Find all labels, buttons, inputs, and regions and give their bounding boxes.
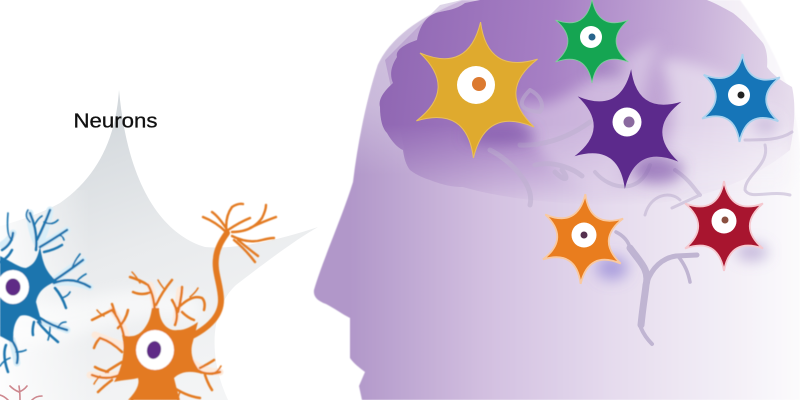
crimson star neuron: [685, 181, 763, 271]
purple star neuron: [573, 66, 683, 192]
blue neuron: [0, 210, 90, 372]
label: Neurons: Neurons: [74, 110, 158, 132]
gold star neuron: [415, 19, 539, 161]
orange star neuron: [542, 192, 624, 286]
star shadows: [465, 62, 778, 280]
axon: [188, 233, 227, 338]
faint dendrite branches: [490, 90, 792, 215]
head light rim: [355, 0, 462, 175]
orange neuron: [90, 204, 276, 400]
blue star neuron: [701, 53, 781, 143]
background gray cusp shape: [0, 90, 318, 400]
dendrites: [92, 277, 220, 400]
brain: [380, 0, 794, 205]
head silhouette: [314, 0, 800, 400]
green star neuron: [556, 0, 628, 83]
dendrite tree: [616, 232, 697, 344]
red neuron fragment: [0, 386, 42, 400]
